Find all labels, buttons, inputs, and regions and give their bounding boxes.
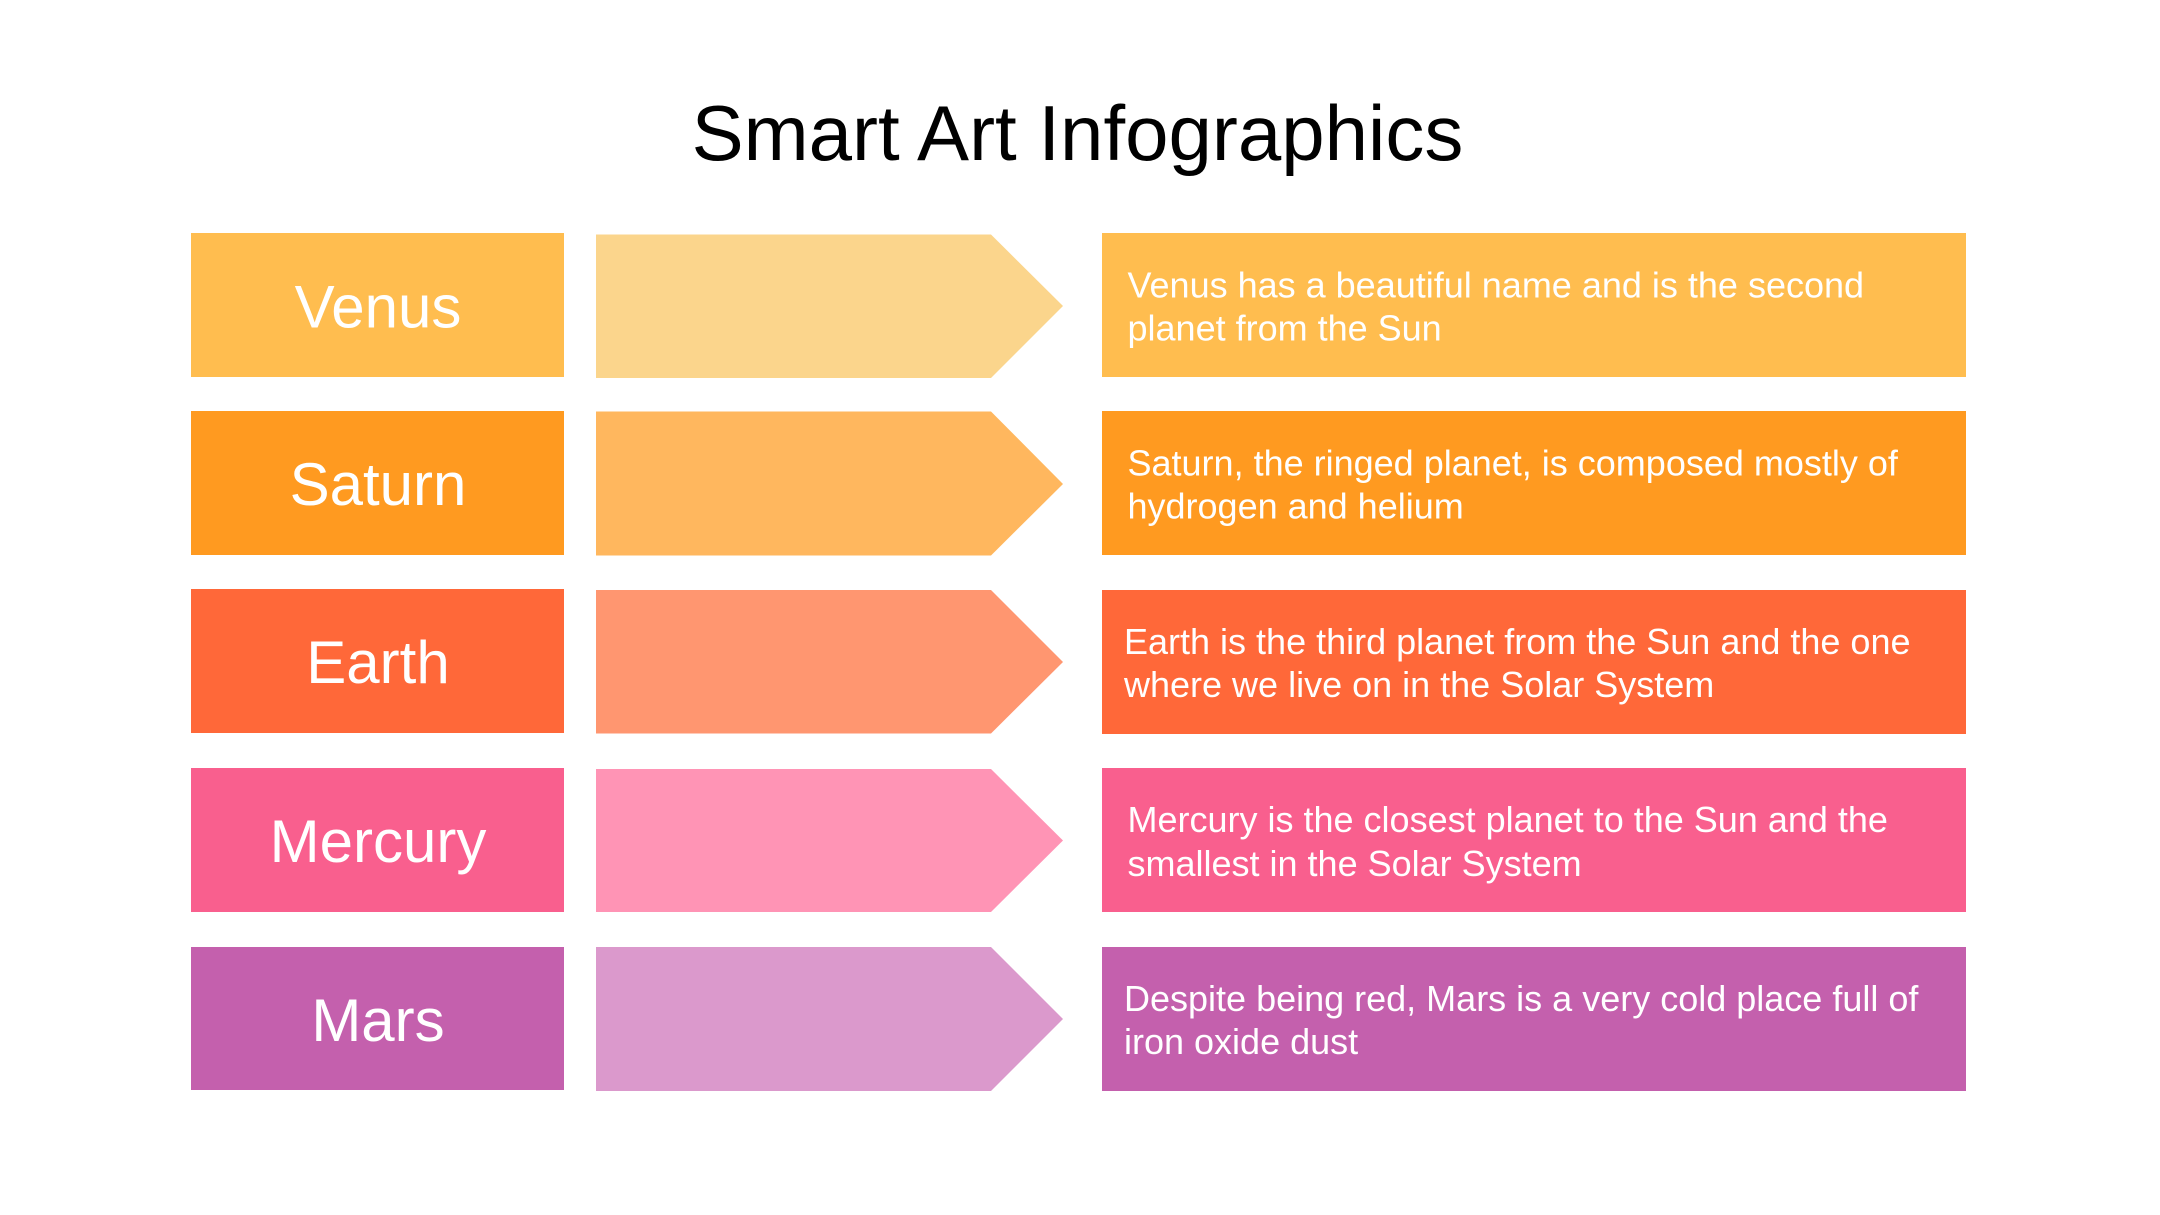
label: Mars: Mars xyxy=(311,987,445,1054)
row: Venus xyxy=(191,233,1966,378)
row: Earth xyxy=(191,589,1966,734)
description: Mercury xyxy=(1102,768,1966,912)
label: Mercury xyxy=(191,768,564,912)
description: Venus: planet from the Sun xyxy=(1128,308,1442,348)
label: Venus: Venus xyxy=(295,274,461,340)
label: Saturn: Saturn xyxy=(290,451,466,518)
label: Mars xyxy=(191,947,564,1090)
title: Smart Art Infographics xyxy=(692,89,1463,177)
label: Mercury: Mercury xyxy=(270,808,486,875)
label: Saturn xyxy=(191,411,564,555)
description: Mars: iron oxide dust xyxy=(1124,1021,1358,1062)
description: Saturn: hydrogen and helium xyxy=(1128,486,1464,526)
description: Venus: Venus has a beautiful name and is the second xyxy=(1128,264,1864,306)
description: Earth xyxy=(1102,590,1966,734)
description: Saturn: Saturn, the ringed planet, is composed mostly of xyxy=(1128,442,1899,484)
row: Mars xyxy=(191,947,1966,1091)
description: Saturn xyxy=(1102,411,1966,555)
description: Mars xyxy=(1102,947,1966,1091)
label: Venus xyxy=(191,233,564,377)
label: Earth: Earth xyxy=(306,629,450,696)
label: Earth xyxy=(191,589,564,733)
description: Mercury: Mercury is the closest planet to the Sun and the xyxy=(1128,799,1888,840)
description: Earth: where we live on in the Solar System xyxy=(1123,664,1714,705)
arrow: Mars xyxy=(596,947,1063,1091)
description: Earth: Earth is the third planet from the Sun and the one xyxy=(1124,621,1910,662)
row: Saturn xyxy=(191,411,1966,556)
description: Venus xyxy=(1102,233,1966,377)
description: Mars: Despite being red, Mars is a very cold place full of xyxy=(1124,978,1919,1019)
arrow: Saturn xyxy=(596,412,1063,556)
arrow: Mercury xyxy=(596,769,1063,912)
arrow: Earth xyxy=(596,590,1063,734)
arrow: Venus xyxy=(596,234,1063,378)
description: Mercury: smallest in the Solar System xyxy=(1128,843,1582,884)
row: Mercury xyxy=(191,768,1966,912)
